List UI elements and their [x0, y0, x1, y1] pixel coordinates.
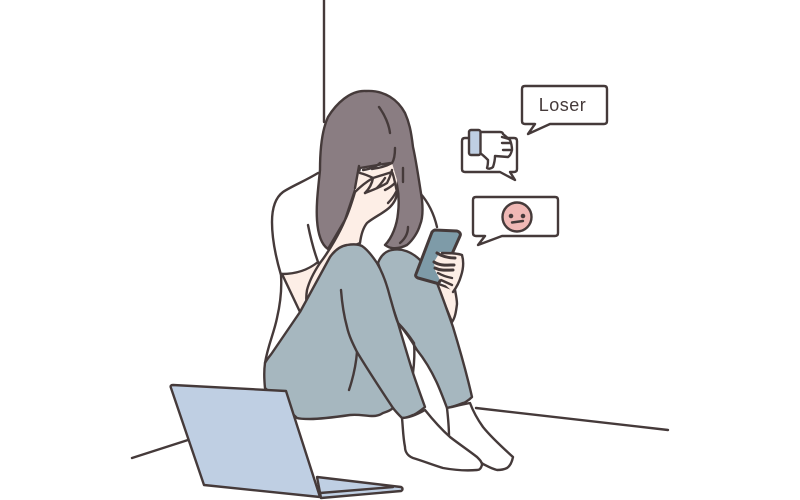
right sock [447, 403, 513, 470]
icon: thumbs down cuff [469, 130, 480, 155]
icon: thumbs down hand [480, 132, 512, 169]
shirt [265, 173, 437, 363]
hand holding phone [434, 252, 463, 292]
speech bubble: sad face [473, 197, 558, 245]
left leg and hips [264, 244, 425, 419]
right leg [378, 249, 472, 408]
speech bubble: Loser [522, 86, 607, 134]
face [355, 163, 397, 200]
hair fringe [355, 148, 395, 188]
room corner and floor lines [132, 0, 668, 458]
text: Loser: Loser [539, 95, 586, 115]
laptop [171, 385, 402, 498]
hair [317, 91, 423, 249]
left sock [402, 410, 482, 470]
phone [416, 230, 460, 283]
icon: sad face [502, 202, 532, 232]
right hand forearm [436, 283, 457, 322]
upper arm outline [282, 274, 300, 312]
arm and hand over face [306, 170, 397, 306]
upper arm skin [282, 258, 332, 312]
speech bubble: thumbs down [462, 130, 517, 180]
